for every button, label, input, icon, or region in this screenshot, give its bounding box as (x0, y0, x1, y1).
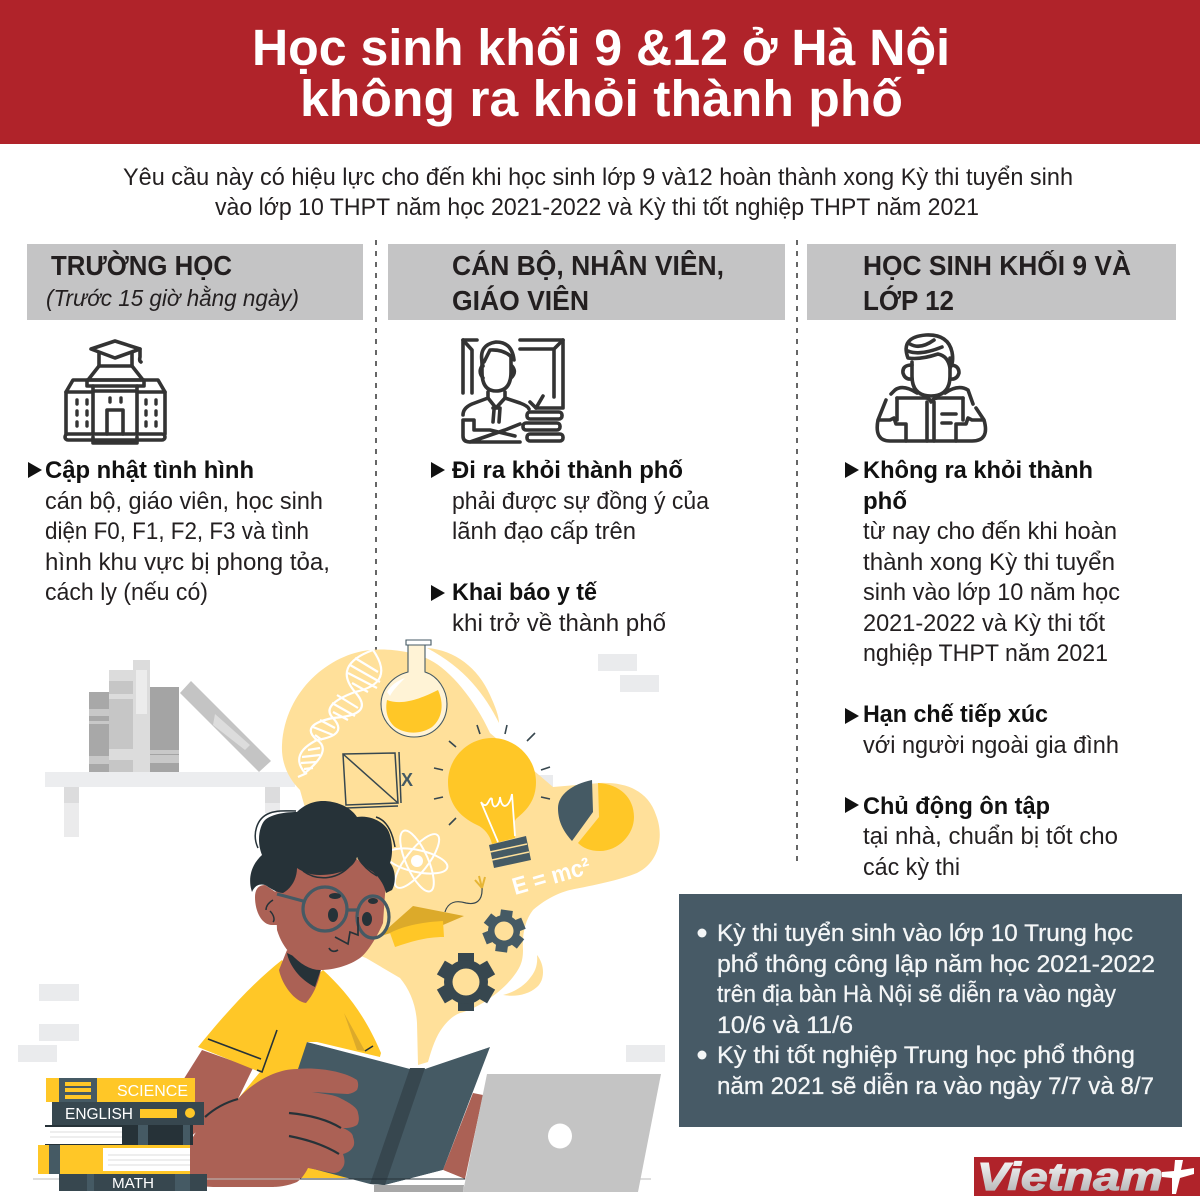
idea cloud (282, 648, 660, 1065)
laptop (33, 1074, 661, 1192)
bullet: leaving the city (431, 457, 710, 545)
panel: schools (27, 244, 363, 606)
bullet: leaving the city: Đi ra khỏi thành phố (452, 457, 683, 484)
title banner: Học sinh khối 9 &12 ở Hà Nội (252, 19, 950, 76)
heading: staff: CÁN BỘ, NHÂN VIÊN, (452, 249, 724, 281)
bullet: update status: hình khu vực bị phong tỏa, (45, 549, 330, 576)
bullet: limit contact: Hạn chế tiếp xúc (863, 701, 1048, 728)
smile (329, 917, 358, 951)
neck (279, 950, 321, 1003)
bullet: limit contact (845, 701, 1119, 759)
panel: staff and teachers (388, 244, 785, 637)
bullet: update status: cán bộ, giáo viên, học sinh (45, 488, 323, 515)
pie chart (558, 780, 634, 851)
graduation cap and tassel (378, 876, 485, 947)
illustration: student studying (18, 640, 665, 1192)
bullet: do not leave the city: từ nay cho đến khi hoàn (863, 518, 1117, 545)
shirt fold (344, 1013, 365, 1051)
logo: Vietnam+: Vietnam (977, 1156, 1163, 1199)
bullet: limit contact: với người ngoài gia đình (863, 732, 1119, 759)
background grey bricks (18, 654, 665, 1062)
heading: schools (27, 244, 363, 320)
bullet: update status: cách ly (nếu có) (45, 579, 208, 606)
geometry square: X (401, 770, 413, 790)
collar shadow (287, 953, 321, 987)
bullet: do not leave the city: nghiệp THPT năm 2021 (863, 640, 1108, 667)
bullet: do not leave the city: phố (863, 488, 907, 515)
eyes (328, 893, 378, 926)
heading: staff: GIÁO VIÊN (452, 285, 589, 316)
intro text: Yêu cầu này có hiệu lực cho đến khi học sinh lớp 9 và12 hoàn thành xong Kỳ thi tuyển sinh (123, 164, 1073, 191)
bullet: update status (28, 457, 330, 606)
large gear (437, 953, 495, 1011)
bullet: do not leave the city: sinh vào lớp 10 năm học (863, 579, 1120, 606)
bullet: leaving the city: phải được sự đồng ý của (452, 488, 710, 515)
book: english (52, 1102, 204, 1125)
left arm (180, 1050, 253, 1145)
panel: grade 9 and 12 students (807, 244, 1176, 881)
light bulb (434, 725, 550, 868)
icon: school building (65, 341, 165, 443)
bullet: do not leave the city: Không ra khỏi thành (863, 457, 1093, 484)
heading: staff (388, 244, 785, 320)
title banner: không ra khỏi thành phố (300, 70, 903, 127)
callout: exam dates (679, 894, 1182, 1127)
stack of books (38, 1078, 207, 1192)
formula: E = mc² (509, 853, 594, 901)
callout item: graduation exam: Kỳ thi tốt nghiệp Trung học phổ thông (717, 1042, 1135, 1069)
heading: schools: TRƯỜNG HỌC (51, 250, 232, 281)
hair outline strokes (255, 811, 395, 878)
book: science (46, 1078, 195, 1102)
bullet: update status: diện F0, F1, F2, F3 và tình (45, 518, 309, 545)
logo: Vietnam+ (974, 1156, 1200, 1199)
flask (381, 640, 447, 737)
callout item: grade 10 exam (698, 920, 1155, 1039)
face (275, 840, 386, 970)
book: science: SCIENCE (117, 1083, 188, 1100)
hand (180, 1069, 359, 1187)
column dividers (376, 240, 797, 862)
open book (298, 1042, 490, 1185)
title banner (0, 0, 1200, 144)
book: yellow (38, 1145, 190, 1174)
t-shirt (198, 960, 381, 1178)
bullet: do not leave the city (845, 457, 1120, 667)
bullet: do not leave the city: thành xong Kỳ thi tuyển (863, 549, 1115, 576)
callout item: grade 10 exam: phổ thông công lập năm học 2021-2022 (717, 951, 1155, 978)
hair (250, 801, 395, 893)
bullet: leaving the city: lãnh đạo cấp trên (452, 518, 636, 545)
bullet: self study: các kỳ thi (863, 854, 960, 881)
book: math: MATH (112, 1176, 154, 1192)
heading: students: HỌC SINH KHỐI 9 VÀ (863, 249, 1131, 281)
bullet: health declaration: khi trở về thành phố (452, 610, 666, 637)
ear detail (266, 900, 274, 922)
small gear (480, 907, 528, 955)
bullet: health declaration: Khai báo y tế (452, 579, 598, 606)
icon: teacher (463, 340, 563, 442)
intro text (123, 164, 1073, 221)
geometry square (343, 752, 413, 808)
bullet: health declaration (431, 579, 666, 637)
sleeve creases (208, 1030, 373, 1072)
heading: students (807, 244, 1176, 320)
atom (384, 826, 450, 896)
bullet: self study: Chủ động ôn tập (863, 793, 1050, 820)
glasses (277, 887, 389, 938)
student figure (180, 801, 490, 1187)
book: english: ENGLISH (65, 1106, 133, 1123)
book: plain dark (45, 1125, 193, 1145)
callout item: graduation exam: năm 2021 sẽ diễn ra vào ngày 7/7 và 8/7 (717, 1073, 1154, 1100)
callout item: grade 10 exam: Kỳ thi tuyển sinh vào lớp 10 Trung học (717, 920, 1133, 947)
callout item: grade 10 exam: trên địa bàn Hà Nội sẽ diễn ra vào ngày (717, 981, 1116, 1008)
bullet: update status: Cập nhật tình hình (45, 457, 254, 484)
icon: student reading (877, 335, 986, 441)
heading: schools: (Trước 15 giờ hằng ngày) (46, 285, 299, 311)
book: math (59, 1174, 207, 1192)
intro text: vào lớp 10 THPT năm học 2021-2022 và Kỳ thi tốt nghiệp THPT năm 2021 (215, 194, 979, 221)
bookshelf (45, 660, 295, 837)
head (250, 801, 395, 970)
ear (255, 885, 280, 925)
bullet: self study (845, 793, 1118, 881)
DNA helix (298, 650, 381, 777)
callout item: grade 10 exam: 10/6 và 11/6 (717, 1012, 853, 1039)
bullet: self study: tại nhà, chuẩn bị tốt cho (863, 823, 1118, 850)
right arm behind laptop (443, 1093, 483, 1179)
bullet: do not leave the city: 2021-2022 và Kỳ thi tốt (863, 610, 1105, 637)
callout item: graduation exam (698, 1042, 1154, 1100)
heading: students: LỚP 12 (863, 285, 954, 316)
